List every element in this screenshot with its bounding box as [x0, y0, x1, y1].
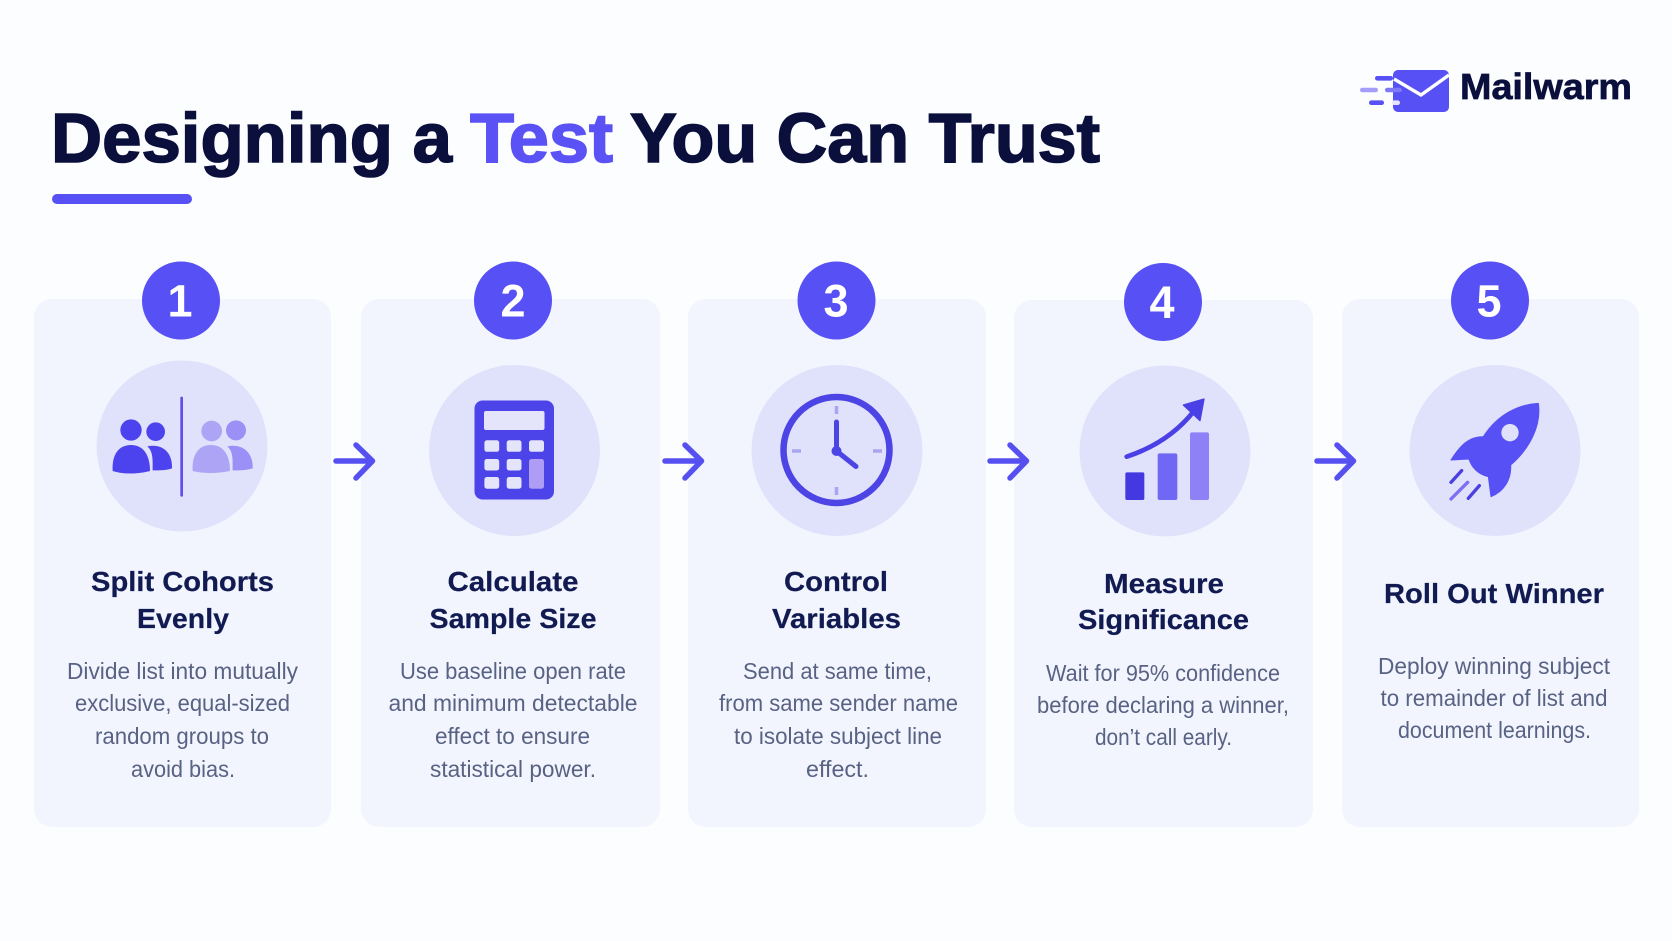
number badge 2 — [474, 262, 552, 340]
title underline — [52, 194, 192, 204]
number badge 5: 5 — [1476, 276, 1502, 326]
title: You Can Trust — [630, 99, 1100, 177]
body text: Wait for 95% confidence — [1046, 660, 1280, 686]
body text: document learnings. — [1398, 717, 1591, 743]
title: Designing a — [51, 99, 453, 177]
heading: Roll Out Winner — [1384, 578, 1604, 609]
body text — [1378, 653, 1611, 743]
body text: Divide list into mutually — [67, 658, 298, 684]
number badge 3 — [798, 262, 876, 340]
arrow 2 to 3 — [665, 445, 702, 478]
heading — [1078, 568, 1249, 635]
number badge 5 — [1451, 262, 1529, 340]
icon: clock — [752, 365, 922, 536]
body text: from same sender name — [719, 690, 958, 716]
heading: Calculate — [448, 566, 578, 597]
logo wordmark: Mailwarm — [1460, 66, 1632, 107]
number badge 2: 2 — [500, 276, 526, 326]
body text: Deploy winning subject — [1378, 653, 1611, 679]
title — [51, 99, 1100, 177]
card background — [34, 299, 331, 827]
arrow 1 to 2 — [336, 445, 372, 478]
arrow 3 to 4 — [990, 445, 1026, 478]
card background — [361, 299, 660, 827]
body text: effect. — [806, 756, 869, 782]
body text — [67, 658, 298, 782]
heading: Significance — [1078, 604, 1249, 635]
heading: Sample Size — [430, 603, 596, 634]
panel: step 4 measure significance — [1014, 263, 1313, 827]
card background — [1342, 299, 1639, 827]
heading: Control — [784, 566, 888, 597]
body text: before declaring a winner, — [1037, 692, 1289, 718]
heading: Split Cohorts — [91, 566, 274, 597]
body text — [388, 658, 638, 782]
number badge 4: 4 — [1149, 277, 1175, 328]
icon: calculator — [429, 365, 600, 536]
card background — [1014, 300, 1313, 827]
panel: step 5 roll out winner — [1342, 262, 1639, 827]
panel: step 3 control variables — [688, 262, 986, 827]
heading — [430, 566, 596, 634]
body text: and minimum detectable — [388, 690, 638, 716]
heading — [91, 566, 274, 634]
icon: rocket — [1410, 365, 1580, 536]
body text: exclusive, equal-sized — [75, 690, 290, 716]
body text — [719, 658, 958, 782]
body text: Use baseline open rate — [400, 658, 626, 684]
body text: to remainder of list and — [1380, 685, 1608, 711]
title: Test — [470, 99, 613, 177]
number badge 1 — [142, 262, 220, 340]
number badge 4 — [1124, 263, 1202, 341]
card background — [688, 299, 986, 827]
body text — [1037, 660, 1289, 750]
panel: step 2 sample size — [361, 262, 660, 827]
body text: effect to ensure — [435, 723, 590, 749]
body text: avoid bias. — [131, 756, 235, 782]
icon: envelope with speed lines — [1360, 70, 1449, 112]
heading: Evenly — [137, 603, 229, 634]
body text: to isolate subject line — [734, 723, 942, 749]
heading: Variables — [772, 603, 901, 634]
number badge 3: 3 — [823, 276, 849, 326]
icon: rising bar chart — [1080, 366, 1250, 536]
arrow 4 to 5 — [1317, 445, 1354, 478]
body text: don’t call early. — [1095, 724, 1232, 750]
icon: split groups — [96, 360, 268, 532]
number badge 1: 1 — [167, 276, 193, 326]
panel: step 1 split cohorts — [34, 262, 331, 827]
body text: statistical power. — [430, 756, 596, 782]
heading — [772, 566, 901, 634]
logo: Mailwarm — [1360, 66, 1632, 112]
heading: Measure — [1104, 568, 1224, 599]
body text: random groups to — [95, 723, 269, 749]
body text: Send at same time, — [743, 658, 932, 684]
